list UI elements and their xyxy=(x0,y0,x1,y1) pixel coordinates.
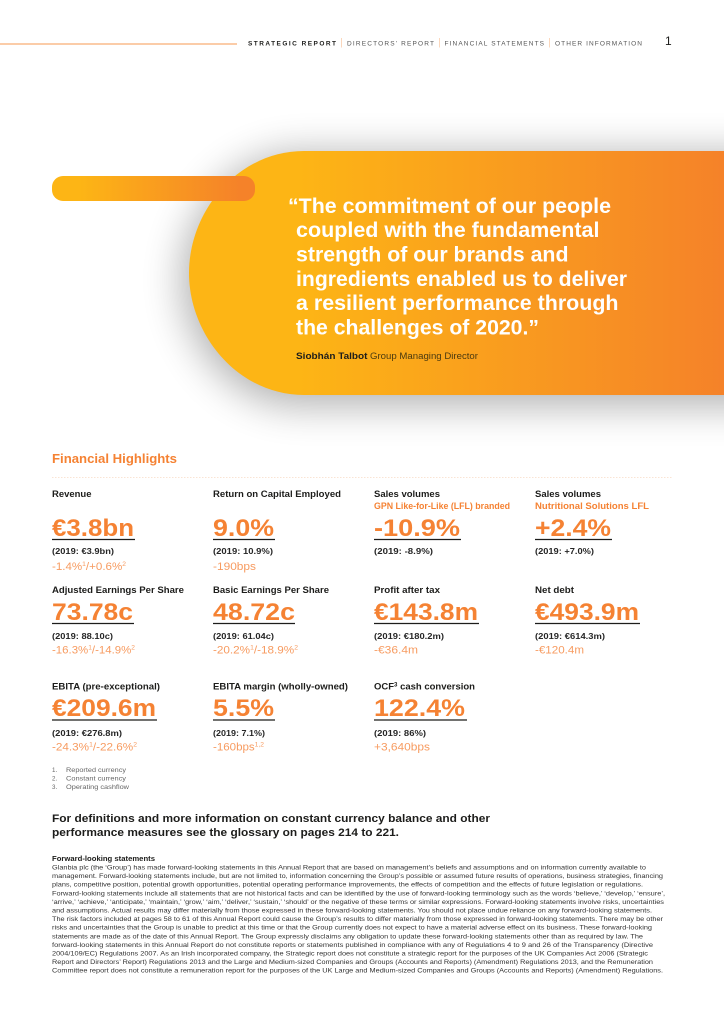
glossary note xyxy=(52,813,491,839)
footnotes: 1. xyxy=(52,767,57,774)
kpi: ocf cash conversion: cash conversion xyxy=(397,682,475,692)
nav: financial statements: FINANCIAL STATEMENTS xyxy=(444,40,545,48)
kpi: adjusted eps: (2019: 88.10c) xyxy=(52,631,113,641)
kpi: ebita margin: 1,2 xyxy=(255,742,264,748)
kpi: ebita: EBITA (pre-exceptional) xyxy=(52,682,160,692)
kpi: return on capital employed: -190bps xyxy=(213,561,256,573)
kpi: net debt: -€120.4m xyxy=(535,644,584,656)
kpi: return on capital employed: 9.0% xyxy=(213,515,274,542)
kpi: sales volumes gpn: -10.9% xyxy=(374,515,460,542)
quote attribution: Group Managing Director xyxy=(370,351,478,361)
forward-looking statements: and assumptions. Actual results may differ materially from those expressed in these forward-looking statements. You should not place undue reliance on any forward-looking statements. xyxy=(52,908,652,914)
kpi: sales volumes nutritional solutions: (2019: +7.0%) xyxy=(535,546,594,556)
quote text: strength of our brands and xyxy=(296,242,568,266)
quote text xyxy=(288,194,628,340)
forward-looking statements: forward-looking statements in this Annual Report do not constitute reports or statements published in compliance with any of Regulations 4 to 9 and 26 of the Transparency (Directive xyxy=(52,942,653,949)
kpi: sales volumes nutritional solutions: Nutritional Solutions LFL xyxy=(535,501,649,511)
kpi: basic eps: (2019: 61.04c) xyxy=(213,631,274,641)
kpi: revenue: 1 xyxy=(82,561,86,568)
kpi: ebita: 2 xyxy=(133,742,137,748)
footnotes: Constant currency xyxy=(66,776,127,782)
kpi: basic eps xyxy=(213,585,329,656)
kpi: net debt xyxy=(535,585,640,656)
kpi: net debt: €493.9m xyxy=(535,599,639,626)
kpi: revenue: -1.4% xyxy=(52,561,81,573)
kpi: net debt: (2019: €614.3m) xyxy=(535,631,605,641)
kpi: ocf cash conversion: 3 xyxy=(394,682,398,688)
kpi: profit after tax xyxy=(374,585,479,656)
kpi: sales volumes gpn: (2019: -8.9%) xyxy=(374,546,433,556)
forward-looking statements: plans, competitive position, potential growth opportunities, potential operating performance improvements, the effects of competition and the effects of future legislation or regulations. xyxy=(52,882,643,889)
header navigation xyxy=(0,34,672,48)
forward-looking statements: The risk factors included at pages 58 to 61 of this Annual Report could cause the Group’s results to differ materially from those expressed in forward-looking statements. There may be other xyxy=(52,916,664,923)
kpi: sales volumes gpn: GPN Like-for-Like (LFL) branded xyxy=(374,501,510,511)
kpi: ebita: -24.3% xyxy=(52,742,87,754)
quote text: the challenges of 2020.” xyxy=(296,316,539,340)
footnotes: Operating cashflow xyxy=(66,784,130,791)
kpi: net debt: Net debt xyxy=(535,585,574,595)
forward-looking statements: Committee report does not constitute a remuneration report for the purposes of the UK Large and Medium-sized Companies and Groups (Accounts and Reports) (Amendment) Regulations. xyxy=(52,968,663,975)
kpi: ebita: €209.6m xyxy=(52,695,156,722)
kpi: adjusted eps: -16.3% xyxy=(52,644,87,656)
glossary note: For definitions and more information on constant currency balance and other xyxy=(52,813,491,825)
kpi: ebita margin: EBITA margin (wholly-owned) xyxy=(213,682,348,692)
footnotes: 2. xyxy=(52,776,57,782)
kpi: sales volumes nutritional solutions: Sales volumes xyxy=(535,489,601,499)
kpi: ocf cash conversion: 122.4% xyxy=(374,695,465,722)
forward-looking statements: statements are made as of the date of this Annual Report. The Group expressly disclaims any obligation to update these forward-looking statements other than as required by law. The xyxy=(52,933,643,940)
kpi: ebita margin xyxy=(213,682,348,754)
kpi: sales volumes gpn xyxy=(374,489,510,556)
kpi: ocf cash conversion: OCF xyxy=(374,682,394,692)
kpi: ocf cash conversion xyxy=(374,682,475,754)
header rule xyxy=(0,43,237,45)
kpi: revenue: 2 xyxy=(122,561,126,568)
forward-looking statements: Forward-looking statements include all statements that are not historical facts and can be identified by the use of forward-looking terminology such as the words ‘believe,’ ‘develop,’ ‘ensure’, xyxy=(52,890,665,897)
kpi: profit after tax: €143.8m xyxy=(374,599,478,626)
kpi: ebita margin: -160bps xyxy=(213,742,253,754)
kpi: adjusted eps: 2 xyxy=(131,644,135,652)
kpi: profit after tax: (2019: €180.2m) xyxy=(374,631,444,641)
kpi: revenue: Revenue xyxy=(52,489,92,499)
kpi: ebita xyxy=(52,682,160,754)
forward-looking statements: management. Forward-looking statements include, but are not limited to, information concerning the Group’s possible or assumed future results of operations, business strategies, financing xyxy=(52,873,663,880)
kpi: profit after tax: Profit after tax xyxy=(374,585,441,595)
forward-looking statements: Forward-looking statements xyxy=(52,856,155,863)
forward-looking statements: risks and uncertainties that the Group is unable to predict at this time or that the Group currently does not expect to have a material adverse effect on its business. These forward-looking xyxy=(52,925,652,932)
kpi: ebita margin: (2019: 7.1%) xyxy=(213,728,265,738)
footnotes: Reported currency xyxy=(66,767,127,774)
kpi: basic eps: 1 xyxy=(250,644,254,652)
forward-looking statements xyxy=(52,856,665,975)
quote text: a resilient performance through xyxy=(296,291,618,315)
quote attribution xyxy=(296,351,478,361)
nav: other information: OTHER INFORMATION xyxy=(555,40,642,48)
accent pill xyxy=(52,176,255,201)
kpi: return on capital employed: (2019: 10.9%) xyxy=(213,546,273,556)
quote text: ingredients enabled us to deliver xyxy=(296,267,628,291)
forward-looking statements: ‘arrive,’ ‘achieve,’ ‘anticipate,’ ‘maintain,’ ‘grow,’ ‘aim,’ ‘deliver,’ ‘sustain,’ ‘should’ or the negative of these terms or similar expressions. Forward-looking statements involve risks, uncertainties xyxy=(52,899,665,906)
kpi: basic eps: 48.72c xyxy=(213,599,295,626)
kpi: ocf cash conversion: +3,640bps xyxy=(374,742,430,754)
footnotes: 3. xyxy=(52,784,57,791)
forward-looking statements: 2004/109/EC) Regulations 2007. As an Irish incorporated company, the Strategic report does not constitute a strategic report for the purposes of the UK Companies Act 2006 (Strategic xyxy=(52,950,649,958)
glossary note: performance measures see the glossary on pages 214 to 221. xyxy=(52,827,399,839)
kpi: ocf cash conversion: (2019: 86%) xyxy=(374,728,426,738)
heading: financial highlights: Financial Highlights xyxy=(52,451,177,466)
banner shape xyxy=(189,151,724,395)
kpi: revenue: /+0.6% xyxy=(86,561,122,573)
kpi: adjusted eps: /-14.9% xyxy=(92,644,131,656)
kpi: return on capital employed xyxy=(213,489,341,573)
forward-looking statements: Report and Directors’ Report) Regulations 2013 and the Large and Medium-sized Companies and Groups (Accounts and Reports) (Amendment) Regulations 2013, and the Remuneration xyxy=(52,959,653,966)
kpi: revenue xyxy=(52,489,135,573)
kpi: basic eps: -20.2% xyxy=(213,644,248,656)
nav: strategic report: STRATEGIC REPORT xyxy=(248,40,336,48)
kpi: basic eps: /-18.9% xyxy=(254,644,294,656)
kpi: adjusted eps: Adjusted Earnings Per Share xyxy=(52,585,184,595)
panel: quote banner xyxy=(52,151,724,406)
kpi: ebita: (2019: €276.8m) xyxy=(52,728,122,738)
kpi: basic eps: 2 xyxy=(294,644,298,652)
kpi: ebita margin: 5.5% xyxy=(213,695,274,722)
quote attribution: Siobhán Talbot xyxy=(296,351,368,361)
kpi: revenue: €3.8bn xyxy=(52,515,134,542)
kpi: sales volumes nutritional solutions xyxy=(535,489,649,556)
kpi: revenue: (2019: €3.9bn) xyxy=(52,546,114,556)
kpi: basic eps: Basic Earnings Per Share xyxy=(213,585,329,595)
kpi: adjusted eps: 73.78c xyxy=(52,599,133,626)
kpi: ebita: /-22.6% xyxy=(93,742,133,754)
kpi: sales volumes gpn: Sales volumes xyxy=(374,489,440,499)
kpi: sales volumes nutritional solutions: +2.4% xyxy=(535,515,611,542)
quote text: “The commitment of our people xyxy=(288,194,611,218)
footnotes xyxy=(52,767,130,791)
kpi: adjusted eps: 1 xyxy=(88,644,92,652)
quote text: coupled with the fundamental xyxy=(296,218,600,242)
kpi: return on capital employed: Return on Capital Employed xyxy=(213,489,341,499)
nav: directors' report: DIRECTORS’ REPORT xyxy=(347,40,434,48)
kpi: adjusted eps xyxy=(52,585,184,656)
kpi: ebita: 1 xyxy=(89,742,93,748)
page number: 1 xyxy=(665,34,672,48)
forward-looking statements: Glanbia plc (the ‘Group’) has made forward-looking statements in this Annual Report that are based on management’s beliefs and assumptions and on information currently available to xyxy=(52,864,646,872)
kpi: profit after tax: -€36.4m xyxy=(374,644,418,656)
